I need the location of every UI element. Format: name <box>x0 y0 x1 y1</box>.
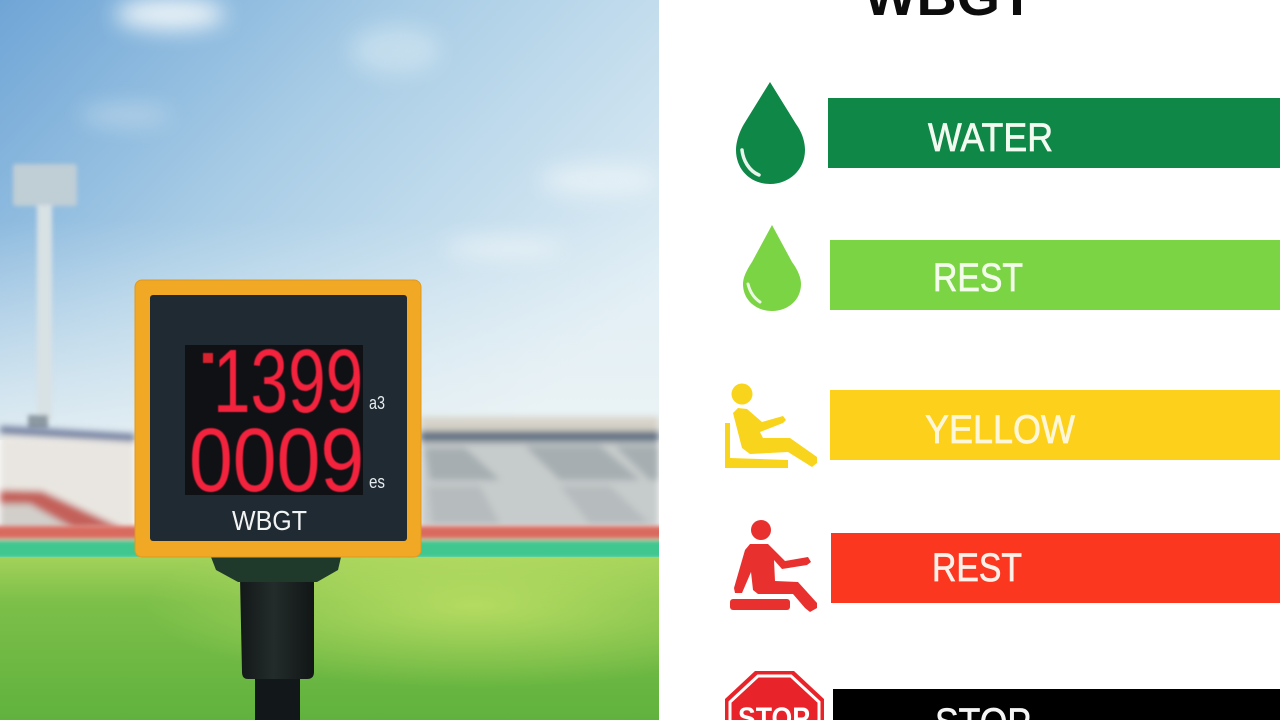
bar: water: WATER <box>928 116 1053 160</box>
floodlight tower <box>13 164 77 429</box>
meter label: WBGT <box>232 505 307 536</box>
icon: light green water drop <box>743 225 801 311</box>
icon: reclining person yellow <box>725 384 817 468</box>
icon: stop sign <box>725 671 824 720</box>
bar: red: REST <box>932 546 1022 590</box>
icon: reclining person red <box>730 520 817 612</box>
sky <box>0 0 660 440</box>
bar: red <box>831 533 1280 603</box>
meter pole <box>211 557 341 720</box>
red readout top: 1399 <box>213 331 363 431</box>
digital display <box>185 345 363 495</box>
panel: stadium photo <box>0 0 665 720</box>
running track <box>0 526 665 559</box>
bar: rest green: REST <box>933 256 1023 300</box>
bar: water <box>828 98 1280 168</box>
bar: yellow: YELLOW <box>925 408 1075 452</box>
bar: rest green <box>830 240 1280 310</box>
icon: dark green water drop <box>736 82 805 184</box>
grass field <box>0 557 659 720</box>
meter casing <box>135 280 421 557</box>
panel: legend <box>725 0 1280 720</box>
small unit labels: es <box>369 472 385 492</box>
red readout bottom: 0009 <box>189 409 364 510</box>
bar: yellow <box>830 390 1280 460</box>
stadium stands <box>0 417 659 530</box>
WBGT meter <box>135 280 421 557</box>
bar: stop <box>833 689 1280 720</box>
small unit labels: a3 <box>369 393 385 413</box>
small unit labels <box>369 393 385 492</box>
meter face <box>150 295 407 541</box>
